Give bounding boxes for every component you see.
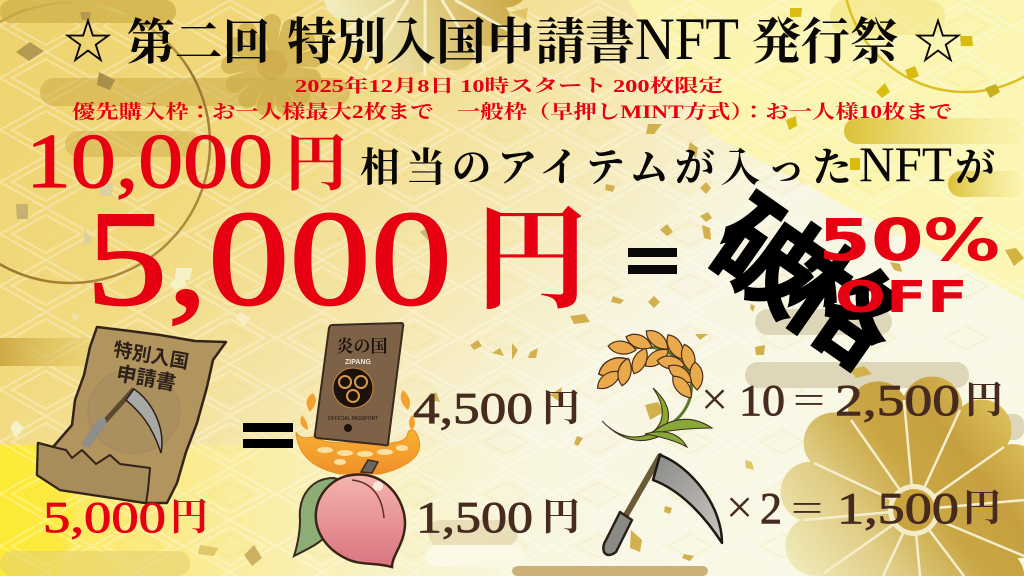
original price <box>26 114 347 204</box>
stamp: 破格: 格 <box>758 207 936 397</box>
badge: 50% OFF: 50% <box>818 206 1000 274</box>
price: scroll: 5,000 <box>43 493 166 542</box>
formula: rice: ＝ <box>790 370 828 425</box>
price: scroll <box>43 486 208 542</box>
formula: rice: 2,500 <box>835 376 960 425</box>
icon: application scroll <box>37 327 226 503</box>
subtitle: purchase limits: 優先購入枠：お一人様最大2枚まで 一般枠（早押しMINT方式）：お一人様10枚まで <box>72 100 952 123</box>
icon: rice stalk <box>594 326 712 447</box>
formula: rice: 円 <box>965 369 1003 424</box>
formula: scythe: × <box>726 481 753 534</box>
equals sign <box>628 248 677 274</box>
formula: rice: × <box>701 373 728 426</box>
icon: passport card: 炎の国 <box>336 332 388 357</box>
title: 第二回 <box>127 4 270 74</box>
formula: scythe <box>726 477 1001 534</box>
flower: small <box>221 14 324 117</box>
icon: flames <box>296 390 420 474</box>
sale price <box>86 170 588 334</box>
price: peach: 円 <box>542 486 580 541</box>
equals sign: scroll <box>243 423 293 448</box>
badge: 50% OFF: OFF <box>835 272 968 323</box>
title: 発行祭 <box>752 2 899 74</box>
icon: passport card: OFFICIAL PASSPORT <box>328 416 378 422</box>
stamp: 破格 <box>684 156 936 397</box>
formula: scythe: 円 <box>963 477 1001 532</box>
icon: scythe <box>603 455 722 555</box>
icon: passport card: ZIPANG <box>345 359 372 366</box>
price: scroll: 円 <box>170 486 208 541</box>
formula: rice: 10 <box>739 376 785 425</box>
headline text: NFT <box>859 136 952 192</box>
headline text: 相当のアイテムが入った <box>360 136 852 193</box>
formula: rice <box>701 369 1003 426</box>
icon: peach <box>294 460 405 567</box>
sale price: 円 <box>475 170 588 332</box>
price: peach <box>416 486 580 542</box>
price: passport: 4,500 <box>413 384 533 433</box>
badge: 50% OFF <box>818 206 1000 323</box>
title: NFT <box>635 6 739 72</box>
original price: 10,000 <box>26 118 273 204</box>
headline text: が <box>955 136 995 193</box>
title: ☆ <box>63 2 113 74</box>
original price: 円 <box>285 114 347 203</box>
arc: right <box>843 0 1024 92</box>
icon: passport card <box>315 323 403 445</box>
title: 特別入国申請書 <box>287 2 635 74</box>
arc: left <box>0 3 210 283</box>
title <box>63 2 963 74</box>
price: peach: 1,500 <box>416 493 533 542</box>
price: passport: 円 <box>542 377 580 432</box>
flower: top <box>324 0 524 76</box>
formula: scythe: 2 <box>760 484 782 533</box>
formula: scythe: ＝ <box>788 478 826 533</box>
stamp: 破格: 破 <box>684 156 862 346</box>
subtitle: date and limit: 2025年12月8日 10時スタート 200枚限定 <box>295 75 723 96</box>
sale price: 5,000 <box>86 184 452 334</box>
icon: application scroll: 特別入国 <box>112 335 191 375</box>
title: ☆ <box>913 2 963 74</box>
formula: scythe: 1,500 <box>837 484 959 533</box>
icon: application scroll: 申請書 <box>114 357 179 396</box>
flower: bottom right <box>770 370 1024 576</box>
price: passport <box>413 377 580 433</box>
